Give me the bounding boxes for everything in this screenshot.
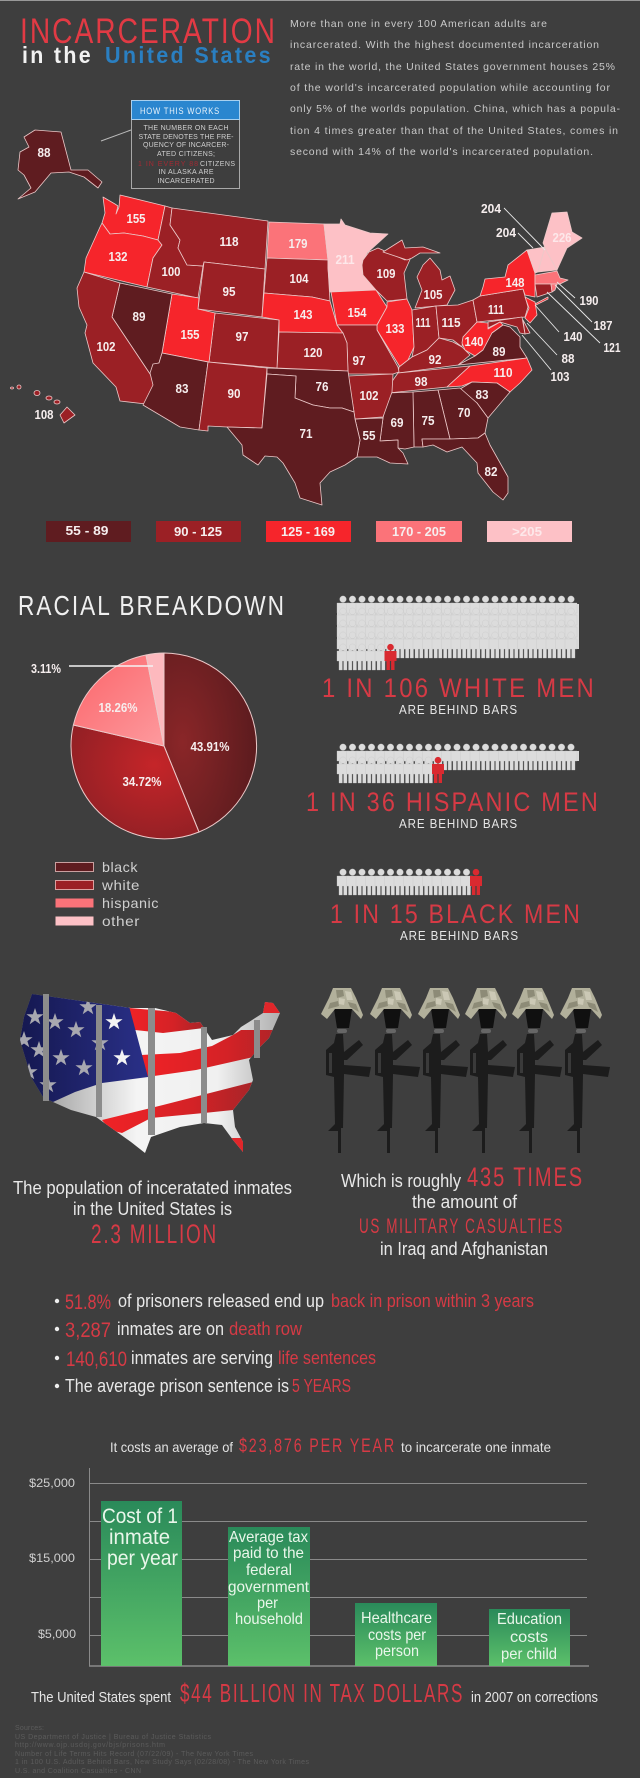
pictogram: 1 in 36 hispanic men: 1 IN 36 HISPANIC MEN <box>306 787 600 817</box>
state: Washington <box>102 195 165 240</box>
state: Mississippi <box>380 392 414 449</box>
sources: http://www.ojp.usdoj.gov/bjs/prisons.htm <box>15 1742 165 1749</box>
state: Iowa: 154 <box>348 305 367 320</box>
state: Kansas: 120 <box>304 345 322 360</box>
state: Minnesota: 211 <box>336 252 354 267</box>
pie legend: white <box>101 877 140 893</box>
text: military casualties comparison: Which is roughly <box>341 1170 462 1191</box>
state: New Hampshire <box>538 247 557 272</box>
northeast leader labels: 187 <box>594 318 612 333</box>
state: Kansas <box>277 332 348 371</box>
bullet: recidivism <box>55 1291 534 1314</box>
text: population of inmates: in the United States is <box>73 1198 232 1219</box>
text: military casualties comparison: the amount of <box>412 1191 518 1212</box>
state: Florida: 82 <box>484 464 498 479</box>
bar: healthcare costs per person: person <box>375 1643 419 1660</box>
pie chart: 18.26% <box>98 700 138 715</box>
state: Tennessee <box>388 366 470 393</box>
state: Virginia <box>458 325 527 365</box>
text: military casualties comparison: 435 TIMES <box>467 1162 584 1192</box>
sources: US Department of Justice | Bureau of Justice Statistics <box>15 1734 212 1741</box>
state: Arkansas <box>348 374 393 419</box>
state: Ohio <box>436 300 477 347</box>
callout: how this works: ATED CITIZENS; <box>157 151 215 158</box>
state: Oklahoma <box>267 368 354 412</box>
state: Maryland <box>488 317 525 334</box>
bullet list of facts <box>55 1291 534 1396</box>
state: Massachusetts <box>535 271 568 284</box>
state: Alabama: 75 <box>422 413 434 428</box>
intro paragraph: incarcerated. With the highest documented incarceration <box>290 39 599 51</box>
state: Louisiana <box>355 418 408 464</box>
state: West Virginia <box>462 322 503 356</box>
y axis labels: $25,000 <box>29 1476 75 1490</box>
state: New York <box>480 250 548 306</box>
bar: education costs per child: costs <box>510 1629 548 1646</box>
state: Idaho <box>147 206 203 298</box>
state: Illinois: 133 <box>386 321 404 336</box>
callout: how this works: HOW THIS WORKS <box>140 106 220 117</box>
footer statement: tax dollars: $44 BILLION IN TAX DOLLARS <box>180 1678 464 1708</box>
bullet: death row <box>55 1319 303 1342</box>
northeast leader labels: 140 <box>564 329 582 344</box>
bullet: life sentences: 140,610 <box>66 1348 127 1371</box>
cost chart title: It costs an average of <box>110 1439 233 1455</box>
state: Minnesota <box>324 219 388 292</box>
state: Colorado <box>209 313 279 368</box>
state: Utah <box>162 294 215 362</box>
pie legend: hispanic <box>102 895 159 911</box>
title <box>20 12 277 68</box>
map legend: 125 - 169 <box>281 524 335 539</box>
state: New Mexico <box>199 362 267 431</box>
state: Tennessee: 98 <box>414 374 428 389</box>
callout: how this works: INCARCERATED <box>158 178 214 185</box>
bullet: death row: inmates are on <box>117 1319 224 1339</box>
bar: average tax paid per household: household <box>235 1611 303 1628</box>
state: Iowa <box>331 290 387 325</box>
intro paragraph <box>290 18 620 158</box>
map legend: 90 - 125 <box>174 524 222 539</box>
bar: cost of 1 inmate per year: per year <box>107 1547 178 1570</box>
state: Pennsylvania <box>473 289 528 322</box>
bar: education costs per child: per child <box>501 1646 557 1663</box>
map legend: 55 - 89 <box>66 523 108 538</box>
northeast leader labels: 121 <box>604 340 620 355</box>
bar: cost of 1 inmate per year: Cost of 1 <box>102 1505 178 1528</box>
state: Alabama <box>413 390 450 447</box>
northeast leader labels: 190 <box>580 293 598 308</box>
state: West Virginia: 140 <box>464 334 484 349</box>
state: Mississippi: 69 <box>390 415 404 430</box>
footer statement: tax dollars: The United States spent <box>31 1690 171 1706</box>
state: Kentucky: 92 <box>428 352 442 367</box>
state: Georgia <box>438 388 488 439</box>
pie chart <box>31 653 257 839</box>
bullet: recidivism: back in prison within 3 years <box>331 1291 534 1311</box>
bar: healthcare costs per person <box>355 1603 437 1666</box>
state: Connecticut <box>535 284 552 297</box>
state: Michigan: 105 <box>424 287 442 302</box>
callout: how this works <box>101 100 240 188</box>
bar: average tax paid per household: federal <box>246 1562 292 1579</box>
bar: average tax paid per household: Average tax <box>229 1529 308 1546</box>
state: Wisconsin: 109 <box>376 266 396 281</box>
sources: 1 in 100 U.S. Adults Behind Bars, New Study Says (02/28/08) - The New York Times <box>15 1759 309 1766</box>
text: population of inmates: 2.3 MILLION <box>91 1219 218 1249</box>
bullet: life sentences: life sentences <box>278 1348 376 1368</box>
pie chart: 43.91% <box>190 739 230 754</box>
sources: Number of Life Terms Hits Record (07/22/09) - The New York Times <box>15 1751 254 1758</box>
state: Alaska: 88 <box>38 145 50 160</box>
bar chart: annual costs <box>29 1468 589 1666</box>
bar: average tax paid per household: paid to the <box>233 1545 304 1562</box>
chart axes and gridlines <box>89 1468 589 1666</box>
pictogram: 1 in 106 white men: ARE BEHIND BARS <box>399 702 518 717</box>
state: Nebraska <box>262 293 343 333</box>
pictogram: 1 in 106 white men: 1 IN 106 WHITE MEN <box>322 673 596 703</box>
text: population of inmates <box>13 1177 292 1249</box>
state: Indiana: 111 <box>416 315 430 330</box>
bar: cost of 1 inmate per year <box>101 1501 182 1666</box>
pie legend: other <box>102 913 140 929</box>
state: Wyoming <box>198 262 265 317</box>
pictogram: 1 in 106 white men <box>322 596 596 717</box>
bullet: death row: death row <box>229 1319 303 1339</box>
y axis labels: $15,000 <box>29 1551 75 1565</box>
text: military casualties comparison: in Iraq and Afghanistan <box>380 1238 548 1259</box>
intro paragraph: only 5% of the worlds population. China, which has a popula- <box>290 103 620 115</box>
state: Delaware <box>523 320 530 334</box>
state: North Carolina <box>447 358 532 392</box>
state: New York: 148 <box>506 275 524 290</box>
northeast leader labels: 204 <box>496 225 517 240</box>
y axis labels: $5,000 <box>38 1627 76 1641</box>
state: Arizona <box>143 353 208 430</box>
state: Georgia: 70 <box>458 405 470 420</box>
map: US states by incarceration frequency <box>10 130 582 505</box>
title: in the <box>22 42 93 68</box>
state: California: 102 <box>96 339 116 354</box>
pie legend: black <box>102 859 139 875</box>
state: Nevada: 89 <box>132 309 146 324</box>
bullet: death row: 3,287 <box>65 1319 111 1342</box>
state: New Jersey <box>525 297 537 323</box>
cost chart title: $23,876 PER YEAR <box>239 1435 396 1457</box>
state: Washington: 155 <box>126 211 146 226</box>
intro paragraph: of the world's incarcerated population while accounting for <box>290 82 610 94</box>
intro paragraph: tion 4 times greater than that of the United States, comes in <box>290 125 618 137</box>
sources <box>15 1725 309 1775</box>
state: Oregon <box>84 223 162 287</box>
state: Utah: 155 <box>180 327 200 342</box>
state: Illinois <box>377 299 414 367</box>
map legend: >205 <box>512 524 542 539</box>
state: Arkansas: 102 <box>360 388 378 403</box>
state: Ohio: 115 <box>442 315 460 330</box>
state: New Mexico: 90 <box>228 386 240 401</box>
title: United States <box>105 42 273 68</box>
state: Wyoming: 95 <box>222 284 236 299</box>
y axis labels <box>29 1476 76 1641</box>
pictogram: 1 in 15 black men: ARE BEHIND BARS <box>400 928 519 943</box>
state: Pennsylvania: 111 <box>488 302 504 317</box>
bar: cost of 1 inmate per year: inmate <box>109 1526 170 1549</box>
bullet: recidivism: 51.8% <box>65 1291 111 1314</box>
state: Florida <box>422 433 508 500</box>
callout: how this works: THE NUMBER ON EACH <box>144 125 228 132</box>
northeast leader labels: 103 <box>550 369 570 384</box>
state: North Dakota: 179 <box>288 236 308 251</box>
state: Missouri: 97 <box>352 353 366 368</box>
state: South Dakota <box>264 258 330 301</box>
northeast leader labels: 204 <box>481 201 502 216</box>
bullet: average sentence: 5 YEARS <box>292 1376 351 1396</box>
bullet: average sentence: The average prison sentence is <box>65 1376 289 1396</box>
heading: racial breakdown: RACIAL BREAKDOWN <box>18 590 286 621</box>
state: Oregon: 132 <box>108 249 128 264</box>
text: population of inmates: The population of inceratated inmates <box>13 1177 292 1198</box>
state: Rhode Island <box>551 284 557 292</box>
bar: education costs per child <box>489 1609 570 1666</box>
state: Michigan <box>383 240 455 308</box>
state: Virginia: 89 <box>492 344 506 359</box>
state: Maine <box>543 212 582 270</box>
callout: how this works: STATE DENOTES THE FRE- <box>138 134 234 141</box>
text: military casualties comparison <box>341 1162 584 1259</box>
pictogram: 1 in 15 black men <box>330 869 582 943</box>
state: South Dakota: 104 <box>290 271 309 286</box>
state: Montana <box>170 208 268 269</box>
bar: average tax paid per household: per <box>257 1595 279 1612</box>
callout: how this works: CITIZENS <box>200 161 235 168</box>
map legend <box>46 521 572 542</box>
state: South Carolina <box>460 382 510 418</box>
bar: healthcare costs per person: Healthcare <box>361 1610 432 1627</box>
callout: how this works: 1 IN EVERY 88 <box>138 161 198 168</box>
cost chart title: to incarcerate one inmate <box>401 1439 551 1455</box>
state: Alaska <box>18 130 102 199</box>
state: Colorado: 97 <box>236 329 248 344</box>
state: Montana: 118 <box>220 234 238 249</box>
bullet: recidivism: of prisoners released end up <box>118 1291 324 1311</box>
bullet: life sentences: inmates are serving <box>131 1348 273 1368</box>
bullet: life sentences <box>55 1348 376 1371</box>
bar: average tax paid per household: government <box>228 1579 310 1596</box>
pie chart: 34.72% <box>122 774 162 789</box>
sources: Sources: <box>15 1725 44 1732</box>
state: Texas: 71 <box>300 426 312 441</box>
pie chart: 3.11% <box>31 661 61 676</box>
state: Hawaii <box>10 385 75 423</box>
state: Nebraska: 143 <box>294 307 312 322</box>
cost chart title <box>110 1435 551 1457</box>
sources: U.S. and Coalition Casualties - CNN <box>15 1768 141 1775</box>
pictogram: 1 in 36 hispanic men <box>306 744 600 831</box>
state: Hawaii: 108 <box>34 407 54 422</box>
icon: US map flag behind bars <box>20 994 280 1153</box>
state: Louisiana: 55 <box>362 428 376 443</box>
state: Idaho: 100 <box>162 264 180 279</box>
state: Vermont <box>527 247 545 273</box>
pictogram: 1 in 15 black men: 1 IN 15 BLACK MEN <box>330 899 582 929</box>
state: Texas <box>227 374 360 505</box>
pictogram: 1 in 36 hispanic men: ARE BEHIND BARS <box>399 816 518 831</box>
pie legend <box>56 859 159 929</box>
state: North Carolina: 110 <box>494 365 512 380</box>
state: Indiana <box>412 306 439 357</box>
intro paragraph: second with 14% of the world's incarcerated population. <box>290 146 593 158</box>
intro paragraph: More than one in every 100 American adults are <box>290 18 547 30</box>
icon: six helmets on rifles <box>321 988 610 1153</box>
bar: education costs per child: Education <box>497 1611 562 1628</box>
bar: average tax paid per household <box>228 1527 310 1666</box>
northeast leader labels: 88 <box>562 351 574 366</box>
state: Kentucky <box>398 338 470 373</box>
intro paragraph: rate in the world, the United States government houses 25% <box>290 61 615 73</box>
bar: healthcare costs per person: costs per <box>368 1627 427 1644</box>
northeast leader labels <box>481 201 620 384</box>
callout: how this works: IN ALASKA ARE <box>158 169 214 176</box>
state: South Carolina: 83 <box>476 387 488 402</box>
title: INCARCERATION <box>20 12 277 51</box>
state: Arizona: 83 <box>176 381 188 396</box>
footer statement: tax dollars: in 2007 on corrections <box>471 1690 598 1706</box>
map legend: 170 - 205 <box>392 524 446 539</box>
state: California <box>77 272 155 404</box>
state: Wisconsin <box>362 248 412 301</box>
callout: how this works: QUENCY OF INCARCER- <box>143 142 230 149</box>
state: Maine: 226 <box>552 230 572 245</box>
state: North Dakota <box>267 222 328 260</box>
state: Missouri <box>337 325 399 374</box>
state: Nevada <box>112 283 172 377</box>
state: Oklahoma: 76 <box>316 379 328 394</box>
